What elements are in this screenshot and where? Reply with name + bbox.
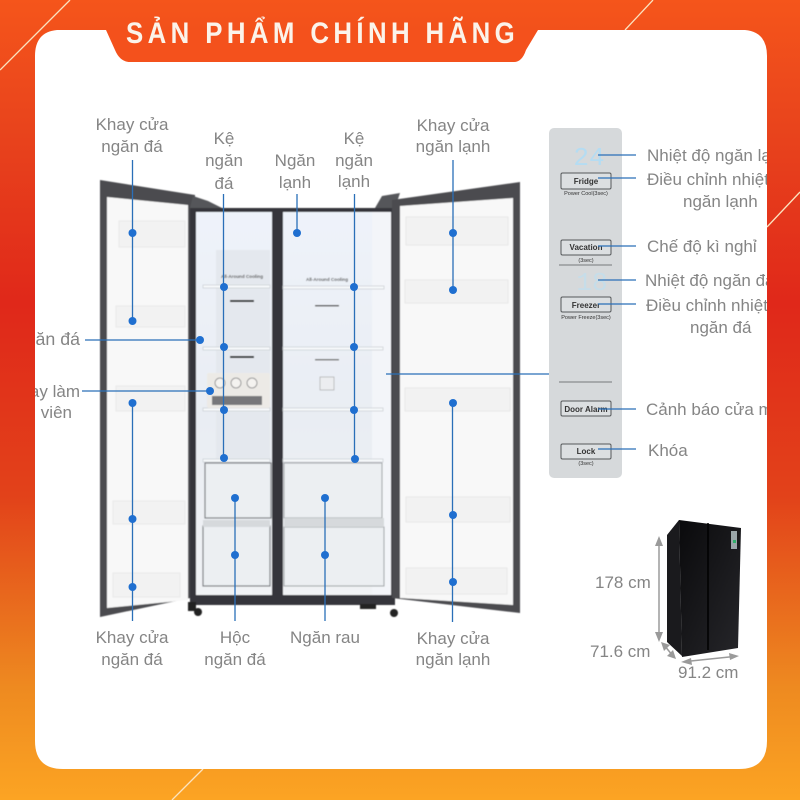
dimension labels: 178 cm	[595, 573, 651, 592]
closed refrigerator with dimensions: 91.2 cm	[678, 663, 738, 682]
blue callout lines and dots	[82, 160, 549, 622]
vacation button: Vacation	[570, 243, 603, 252]
fridge part labels: Khay cửa	[417, 116, 490, 135]
fridge part labels: Hộc	[220, 628, 251, 647]
freezer button: Power Freeze(3sec)	[561, 315, 611, 321]
refrigerator with open doors	[100, 180, 520, 617]
fridge part labels: lạnh	[338, 172, 370, 191]
fridge part labels: Khay cửa	[96, 115, 169, 134]
fridge part labels: Ngăn đá	[13, 329, 80, 349]
fridge part labels: Ngăn	[275, 151, 315, 170]
fridge part labels: Khay cửa	[96, 628, 169, 647]
fridge part labels: ngăn đá	[204, 650, 266, 669]
control panel callout lines	[598, 155, 636, 449]
control panel labels: ngăn lạnh	[683, 192, 758, 211]
fridge part labels: Khay cửa	[417, 629, 490, 648]
fridge temperature display: 24	[573, 143, 605, 173]
feet	[188, 602, 398, 617]
fridge part labels: Kệ	[214, 129, 234, 148]
control panel	[549, 128, 622, 478]
fridge part labels: ngăn đá	[101, 650, 163, 669]
lock button	[561, 444, 611, 467]
fridge button	[561, 173, 611, 197]
lock button: (3sec)	[578, 461, 594, 467]
control panel labels: Chế độ kì nghỉ	[647, 237, 757, 256]
control panel labels: Nhiệt độ ngăn đá	[645, 271, 775, 290]
fridge part labels: ngăn lạnh	[416, 650, 490, 669]
fridge part labels: đá	[215, 174, 234, 193]
fridge drawers	[284, 463, 384, 586]
door alarm button	[561, 401, 611, 416]
door alarm button: Door Alarm	[564, 405, 608, 414]
fridge part labels: Khay làm	[9, 382, 80, 401]
dimension arrows	[655, 536, 739, 665]
closed refrigerator with dimensions	[590, 520, 741, 682]
fridge button: Fridge	[574, 177, 599, 186]
control panel labels: Khóa	[648, 441, 688, 460]
banner title: SẢN PHẨM CHÍNH HÃNG	[126, 15, 515, 49]
icon: closed black fridge	[667, 520, 741, 657]
closed refrigerator with dimensions: 71.6 cm	[590, 642, 650, 661]
freezer shelves	[203, 285, 270, 462]
fridge part labels: đá viên	[13, 403, 72, 422]
fridge part labels: Ngăn rau	[290, 628, 360, 647]
lock button: Lock	[577, 447, 596, 456]
freezer button: Freezer	[572, 301, 600, 310]
freezer temperature display: 18	[576, 268, 608, 298]
right door	[392, 182, 520, 613]
fridge part labels: lạnh	[279, 173, 311, 192]
fridge part labels: ngăn	[205, 151, 243, 170]
freezer button	[561, 297, 611, 321]
fridge compartment	[283, 212, 391, 595]
control panel labels: Nhiệt độ ngăn lạnh	[647, 146, 790, 165]
fridge part labels	[9, 115, 490, 669]
vacation button	[561, 240, 611, 264]
fridge part labels: ngăn lạnh	[416, 137, 490, 156]
control panel labels: Điều chỉnh nhiệt độ	[647, 170, 793, 189]
control panel labels: ngăn đá	[690, 318, 752, 337]
fridge part labels: ngăn đá	[101, 137, 163, 156]
fridge compartment: All-Around Cooling	[306, 277, 348, 282]
freezer compartment: All-Around Cooling	[221, 274, 263, 279]
left door	[100, 180, 195, 617]
control panel labels: Cảnh báo cửa mở	[646, 400, 784, 419]
fridge part labels: Kệ	[344, 129, 364, 148]
fridge button: Power Cool(3sec)	[564, 191, 608, 197]
fridge shelves	[283, 286, 384, 462]
control panel labels	[646, 149, 767, 456]
freezer compartment	[196, 212, 272, 595]
freezer drawers	[203, 463, 271, 586]
control panel labels: Điều chỉnh nhiệt độ	[646, 296, 792, 315]
banner: genuine product	[106, 15, 538, 62]
ice maker	[207, 373, 270, 408]
fridge part labels: ngăn	[335, 151, 373, 170]
cabinet body	[190, 208, 395, 605]
vacation button: (3sec)	[578, 258, 594, 264]
